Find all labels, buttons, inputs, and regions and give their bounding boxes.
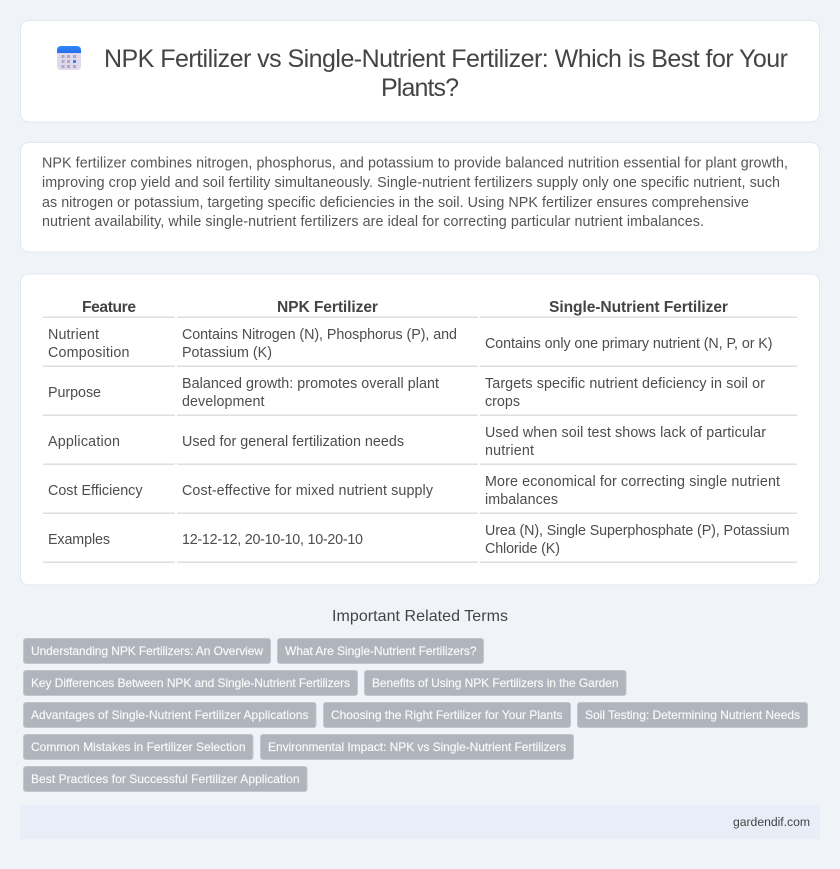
row: examples: 12-12-12, 20-10-10, 10-20-10 (182, 532, 363, 548)
row: application: nutrient (485, 443, 534, 459)
table header row: Feature (82, 299, 136, 316)
row: examples (43, 523, 797, 563)
tag (260, 734, 574, 760)
row: purpose: Purpose (48, 385, 101, 401)
footer (20, 805, 820, 839)
intro text: as nitrogen or potassium, targeting specific deficiencies in the soil. Using NPK fertilizer ensures comprehensive (42, 195, 749, 211)
intro text: improving crop yield and soil fertility simultaneously. Single-nutrient fertilizers supply only one specific nutrient, such (42, 175, 780, 191)
tag (24, 734, 253, 760)
row: examples: Examples (48, 532, 110, 548)
row: cost efficiency: More economical for correcting single nutrient (485, 474, 780, 490)
heading: important related terms: Important Related Terms (332, 608, 508, 625)
tag: What Are Single-Nutrient Fertilizers? (285, 644, 477, 658)
tag (578, 702, 808, 728)
row: nutrient composition: Composition (48, 345, 130, 361)
row: nutrient composition: Contains only one primary nutrient (N, P, or K) (485, 336, 772, 352)
row: purpose: Balanced growth: promotes overall plant (182, 376, 439, 392)
tag: Understanding NPK Fertilizers: An Overview (31, 644, 263, 658)
table header row: NPK Fertilizer (277, 299, 378, 316)
title: NPK Fertilizer vs Single-Nutrient Fertilizer: Which is Best for Your (104, 45, 788, 73)
icon: calendar (57, 46, 81, 70)
related terms tags (24, 638, 808, 792)
tag: Soil Testing: Determining Nutrient Needs (585, 708, 800, 722)
row: purpose: Targets specific nutrient deficiency in soil or (485, 376, 765, 392)
row: cost efficiency (43, 474, 797, 514)
panel: comparison table (20, 274, 820, 585)
intro text: nutrient availability, while single-nutrient fertilizers are ideal for correcting particular nutrient imbalances. (42, 214, 704, 230)
panel: introduction (20, 142, 820, 252)
tag: Best Practices for Successful Fertilizer Application (31, 772, 300, 786)
tag (278, 638, 484, 664)
row: nutrient composition: Potassium (K) (182, 345, 272, 361)
tag: Environmental Impact: NPK vs Single-Nutrient Fertilizers (268, 740, 566, 754)
tag (24, 766, 307, 792)
row: nutrient composition (43, 327, 797, 367)
row: application: Used for general fertilization needs (182, 434, 404, 450)
tag (24, 638, 270, 664)
row: nutrient composition: Nutrient (48, 327, 99, 343)
row: nutrient composition: Contains Nitrogen (N), Phosphorus (P), and (182, 327, 457, 343)
tag: Common Mistakes in Fertilizer Selection (31, 740, 246, 754)
tag (24, 702, 316, 728)
row: application (43, 425, 797, 465)
intro text: NPK fertilizer combines nitrogen, phosphorus, and potassium to provide balanced nutrition essential for plant growth, (42, 156, 788, 172)
row: application: Used when soil test shows lack of particular (485, 425, 766, 441)
row: cost efficiency: Cost-effective for mixed nutrient supply (182, 483, 434, 499)
tag (364, 670, 626, 696)
row: purpose: crops (485, 394, 520, 410)
table header row (43, 299, 797, 318)
title: Plants? (381, 74, 459, 102)
tag: Choosing the Right Fertilizer for Your Plants (331, 708, 562, 722)
table header row: Single-Nutrient Fertilizer (549, 299, 728, 316)
tag: Key Differences Between NPK and Single-Nutrient Fertilizers (31, 676, 350, 690)
tag (324, 702, 570, 728)
row: examples: Chloride (K) (485, 541, 560, 557)
panel: header (20, 20, 820, 122)
row: examples: Urea (N), Single Superphosphate (P), Potassium (485, 523, 790, 539)
tag: Advantages of Single-Nutrient Fertilizer Applications (31, 708, 308, 722)
tag (24, 670, 358, 696)
row: cost efficiency: imbalances (485, 492, 558, 508)
row: cost efficiency: Cost Efficiency (48, 483, 143, 499)
tag: Benefits of Using NPK Fertilizers in the Garden (372, 676, 618, 690)
row: application: Application (48, 434, 120, 450)
row: purpose (43, 376, 797, 416)
footer source text: gardendif.com (733, 815, 810, 829)
row: purpose: development (182, 394, 265, 410)
